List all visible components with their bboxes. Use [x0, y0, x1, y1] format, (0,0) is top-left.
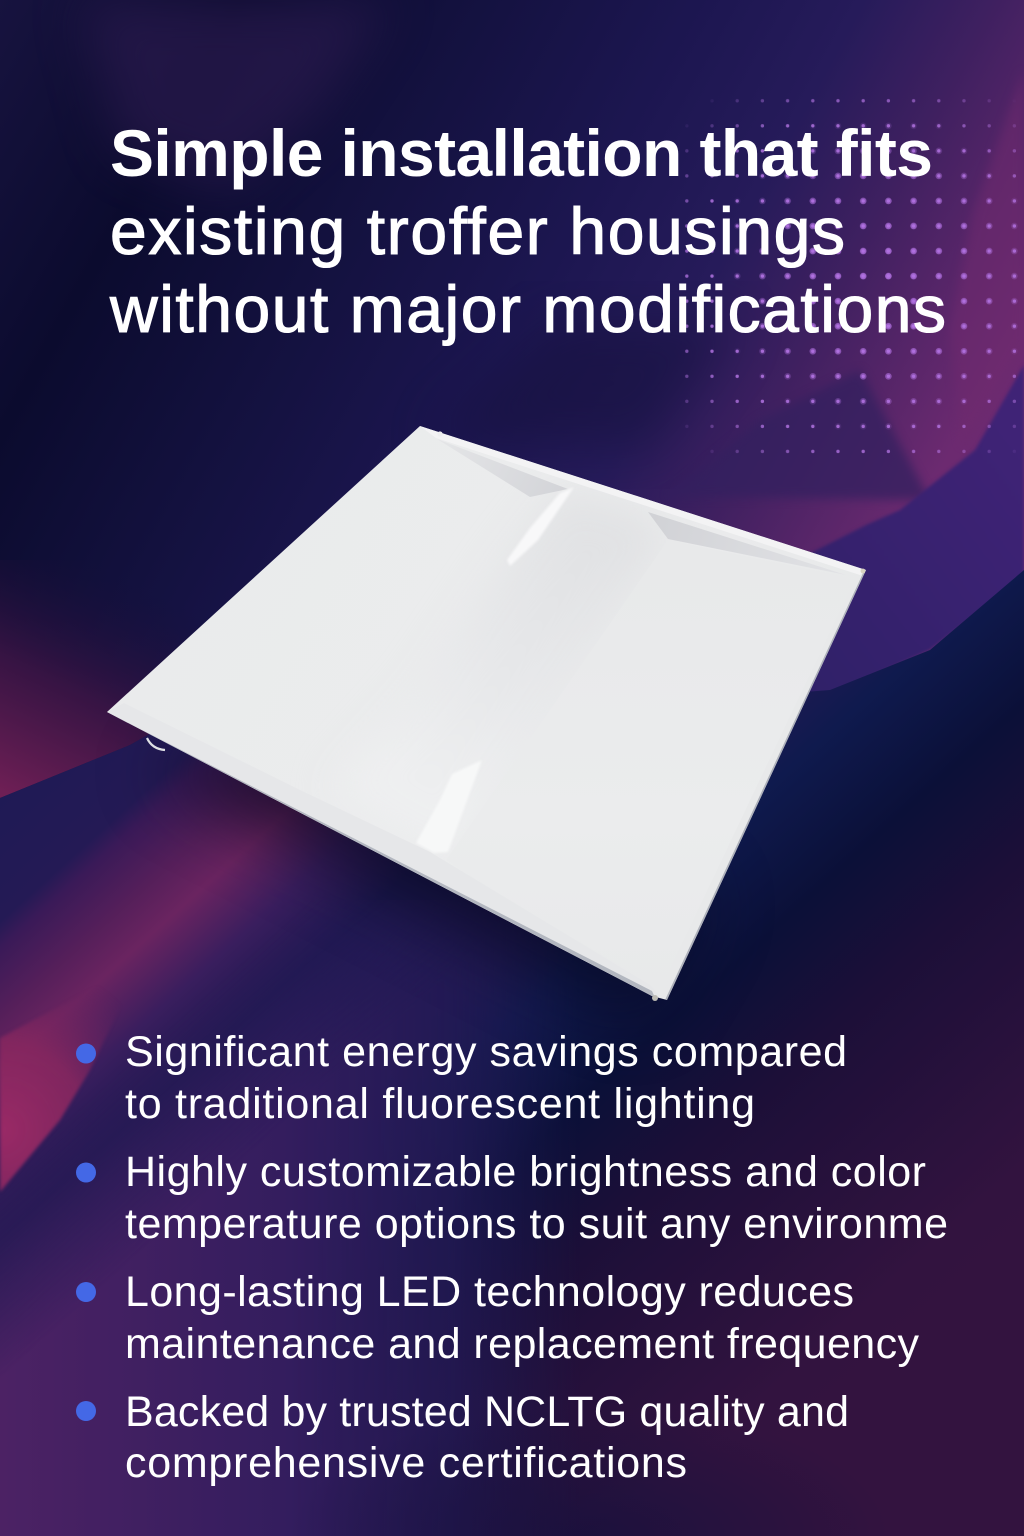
- title: existing troffer housings: [110, 194, 845, 268]
- mounting clip: top right: [861, 569, 865, 573]
- bullet 1: [76, 1028, 847, 1128]
- mounting clip: left: [147, 738, 165, 750]
- central curved bump shading: [552, 514, 636, 584]
- panel body: [107, 426, 866, 1000]
- lower glare: [416, 760, 482, 853]
- bullet 3: maintenance and replacement frequency: [125, 1320, 920, 1368]
- left reflector wedge: [450, 446, 568, 497]
- bullet 4: Backed by trusted NCLTG quality and: [125, 1388, 849, 1436]
- title: [109, 116, 946, 346]
- bullet 2: temperature options to suit any environme: [125, 1200, 948, 1248]
- mounting clip: bottom: [652, 995, 658, 1001]
- title: Simple installation that fits: [110, 116, 933, 190]
- bullet 1: to traditional fluorescent lighting: [125, 1080, 755, 1128]
- bullet list: [76, 1028, 948, 1487]
- bottom seam band: [107, 703, 660, 998]
- right reflector wedge: [648, 512, 830, 571]
- bullet 2: Highly customizable brightness and color: [125, 1148, 926, 1196]
- mounting clip: top left: [437, 431, 443, 437]
- dot grid pattern: [680, 94, 1024, 460]
- bullet 3: [76, 1268, 920, 1368]
- bullet 1: Significant energy savings compared: [125, 1028, 847, 1076]
- bullet 4: [76, 1388, 849, 1487]
- panel drop shadow: [150, 680, 710, 1020]
- lower frame edge: [107, 712, 656, 1000]
- upper glare: [507, 487, 574, 566]
- bullet 4: comprehensive certifications: [125, 1439, 687, 1487]
- title: without major modifications: [109, 272, 946, 346]
- product: LED troffer panel: [107, 426, 866, 1001]
- bullet 2: [76, 1148, 948, 1248]
- right flat reflector: [446, 540, 850, 990]
- top frame strip: [420, 426, 866, 575]
- bullet 3: Long-lasting LED technology reduces: [125, 1268, 854, 1316]
- right frame edge: [666, 571, 865, 1000]
